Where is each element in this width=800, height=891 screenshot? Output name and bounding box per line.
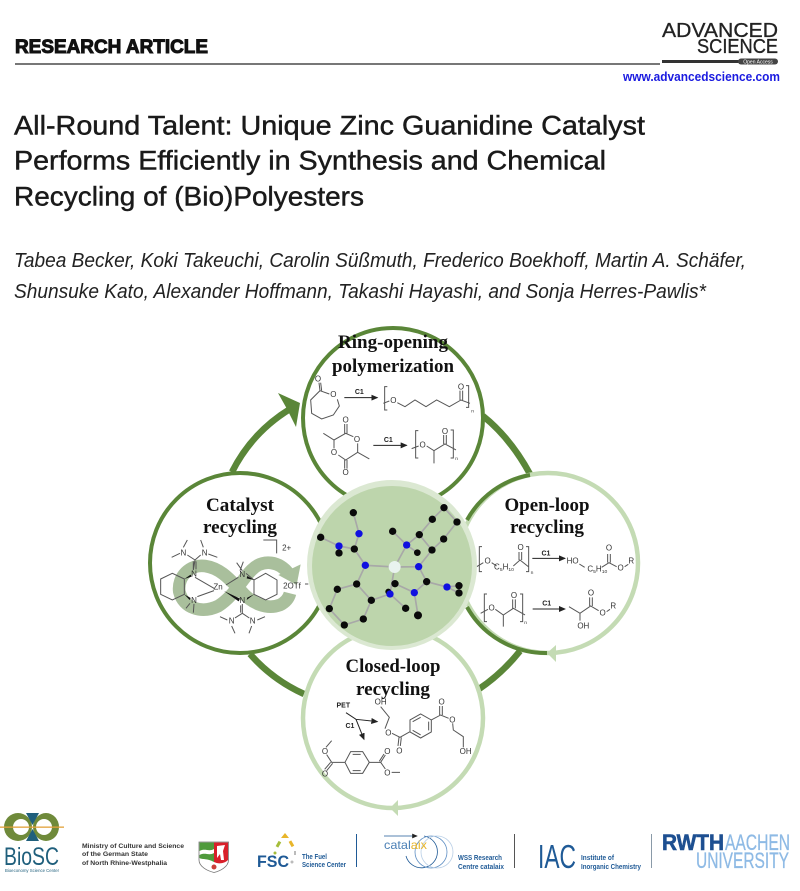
scheme: depolymerization reactions: n: [524, 620, 527, 626]
icon: NRW coat of arms: [199, 842, 228, 872]
icon: infinity recycling arrow: [179, 563, 301, 610]
structure: zinc guanidine complex: N: [239, 570, 245, 579]
panel: catalyst recycling: Catalyst: [206, 496, 275, 516]
structure: zinc guanidine complex: N: [180, 549, 186, 558]
scheme: ROP reactions: C1: [355, 389, 364, 396]
scheme: PET depolymerization: OH: [460, 747, 472, 756]
scheme: depolymerization reactions: O: [606, 543, 612, 552]
logo: catalaix: catalaix: [384, 838, 427, 852]
logo text: Ministry of Culture and Science: [82, 843, 184, 867]
scheme: ROP reactions: O: [330, 390, 336, 399]
scheme: ROP reactions: O: [442, 427, 448, 436]
structure: zinc guanidine complex: 2+: [282, 543, 292, 552]
journal logo: Advanced Science: Open Access: [743, 60, 773, 66]
structure: zinc guanidine complex: N: [191, 569, 197, 578]
scheme: depolymerization reactions: C: [587, 564, 593, 573]
logo: BioSC: Bioeconomy Science Center: [5, 868, 59, 873]
logo: Institute of Inorganic Chemistry: Inorganic Chemistry: [581, 864, 641, 871]
connecting arrows between circles: [232, 393, 530, 694]
scheme: depolymerization reactions: 5: [593, 569, 596, 575]
panel: ring-opening polymerization: polymerization: [332, 357, 455, 377]
logo: Fuel Science Center: [257, 833, 357, 871]
panel: open-loop recycling: [458, 473, 638, 662]
scheme: ROP reactions: n: [455, 456, 458, 462]
logo text: Ministry of Culture and Science: Ministry of Culture and Science: [82, 843, 184, 850]
scheme: PET depolymerization: O: [439, 698, 445, 707]
journal url: www.advancedscience.com: [622, 69, 780, 84]
title: [14, 110, 646, 212]
scheme: PET depolymerization: OH: [375, 698, 387, 707]
scheme: ROP reactions: O: [331, 448, 337, 457]
structure: zinc guanidine complex: N: [191, 596, 197, 605]
panel: catalyst recycling: recycling: [203, 518, 278, 538]
panel: central catalyst structure: [307, 480, 477, 650]
panel: closed-loop recycling: Closed-loop: [346, 657, 440, 677]
panel: catalyst recycling: [150, 473, 330, 653]
scheme: PET depolymerization: O: [384, 747, 390, 756]
panel: ring-opening polymerization: Ring-opening: [338, 333, 449, 353]
logo: catalaix: [384, 834, 515, 871]
carbon atoms: [317, 504, 463, 629]
authors: Shunsuke Kato, Alexander Hoffmann, Takashi Hayashi, and Sonja Herres-Pawlis*: [14, 281, 707, 303]
logo: catalaix: Centre catalaix: [458, 864, 504, 871]
scheme: PET depolymerization: PET: [337, 703, 351, 710]
scheme: depolymerization reactions: R: [610, 602, 616, 611]
scheme: PET depolymerization: O: [385, 728, 391, 737]
logo: Fuel Science Center: Science Center: [302, 862, 346, 869]
icon: light arrowhead: [547, 645, 556, 662]
scheme: ROP reactions: O: [315, 374, 321, 383]
nitrogen atoms: [335, 530, 451, 598]
journal logo: Advanced Science: ADVANCED: [662, 20, 778, 42]
scheme: ROP reactions: O: [343, 416, 349, 425]
logo: Institute of Inorganic Chemistry: Institute of: [581, 855, 615, 862]
scheme: ROP reactions: O: [420, 440, 426, 449]
scheme: ROP reactions: n: [471, 408, 474, 414]
scheme: ROP reactions: O: [390, 396, 396, 405]
scheme: ROP reactions: [311, 374, 474, 477]
scheme: ROP reactions: C1: [384, 437, 393, 444]
logo text: Ministry of Culture and Science: of the German State: [82, 851, 148, 858]
scheme: depolymerization reactions: n: [531, 570, 534, 576]
logo: Fuel Science Center: FSC: [257, 852, 289, 871]
scheme: depolymerization reactions: C: [494, 562, 500, 571]
scheme: depolymerization reactions: O: [511, 591, 517, 600]
journal logo: Advanced Science: SCIENCE: [697, 36, 778, 58]
scheme: depolymerization reactions: C1: [542, 550, 551, 557]
authors: [14, 250, 746, 303]
logo: RWTH Aachen University: RWTH: [662, 830, 724, 855]
scheme: PET depolymerization: O: [384, 768, 390, 777]
authors: Tabea Becker, Koki Takeuchi, Carolin Süßmuth, Frederico Boekhoff, Martin A. Schäfer,: [14, 250, 746, 272]
structure: zinc guanidine complex: N: [229, 617, 235, 626]
logo: RWTH Aachen University: [662, 830, 790, 873]
scheme: depolymerization reactions: C1: [542, 601, 551, 608]
scheme: ROP reactions: O: [354, 435, 360, 444]
panel: closed-loop recycling: [303, 628, 483, 816]
logo: catalaix: WSS Research: [458, 855, 502, 862]
panel: open-loop recycling: recycling: [510, 518, 585, 538]
logo text: Ministry of Culture and Science: of North Rhine-Westphalia: [82, 860, 167, 867]
scheme: depolymerization reactions: [477, 543, 634, 631]
zinc atom: [389, 561, 401, 573]
scheme: depolymerization reactions: O: [618, 563, 624, 572]
scheme: depolymerization reactions: O: [489, 603, 495, 612]
scheme: depolymerization reactions: O: [485, 556, 491, 565]
logo: Institute of Inorganic Chemistry: [538, 834, 652, 875]
scheme: PET depolymerization: [322, 698, 472, 778]
scheme: depolymerization reactions: O: [600, 609, 606, 618]
title: All-Round Talent: Unique Zinc Guanidine Catalyst: [14, 110, 646, 140]
scheme: depolymerization reactions: O: [518, 543, 524, 552]
panel: ring-opening polymerization: [303, 328, 483, 508]
scheme: depolymerization reactions: R: [628, 556, 634, 565]
logo: Institute of Inorganic Chemistry: IAC: [538, 838, 576, 875]
scheme: depolymerization reactions: OH: [577, 622, 590, 631]
molecule bonds: [321, 508, 459, 625]
scheme: depolymerization reactions: 10: [508, 567, 514, 573]
scheme: depolymerization reactions: HO: [567, 557, 579, 566]
structure: zinc guanidine complex: 2OTf: [283, 582, 302, 591]
title: Recycling of (Bio)Polyesters: [14, 182, 364, 212]
scheme: depolymerization reactions: 5: [500, 567, 503, 573]
structure: zinc guanidine complex: N: [239, 596, 245, 605]
title: Performs Efficiently in Synthesis and Chemical: [14, 146, 606, 176]
logo: Fuel Science Center: The Fuel: [302, 854, 327, 861]
scheme: depolymerization reactions: O: [588, 589, 594, 598]
icon: light arrowhead: [390, 800, 398, 816]
scheme: PET depolymerization: O: [396, 747, 402, 756]
structure: zinc guanidine complex: Zn: [213, 583, 223, 592]
logo: BioSC: [0, 813, 64, 873]
scheme: PET depolymerization: O: [322, 769, 328, 778]
journal logo: Advanced Science: [662, 20, 778, 66]
scheme: PET depolymerization: O: [322, 747, 328, 756]
panel: closed-loop recycling: recycling: [356, 680, 431, 700]
scheme: PET depolymerization: O: [449, 716, 455, 725]
scheme: PET depolymerization: C1: [346, 723, 355, 730]
structure: zinc guanidine complex: N: [250, 617, 256, 626]
structure: zinc guanidine complex: N: [202, 549, 208, 558]
scheme: depolymerization reactions: 10: [602, 569, 607, 575]
structure: zinc guanidine complex: [161, 540, 308, 633]
logo: BioSC: BioSC: [4, 843, 59, 871]
scheme: ROP reactions: O: [343, 468, 349, 477]
header: research article: RESEARCH ARTICLE: [15, 37, 208, 58]
scheme: depolymerization reactions: H: [503, 562, 509, 571]
panel: open-loop recycling: Open-loop: [504, 496, 590, 516]
icon: large arrowhead: [278, 393, 300, 427]
scheme: depolymerization reactions: H: [596, 564, 602, 573]
scheme: ROP reactions: O: [458, 382, 464, 391]
